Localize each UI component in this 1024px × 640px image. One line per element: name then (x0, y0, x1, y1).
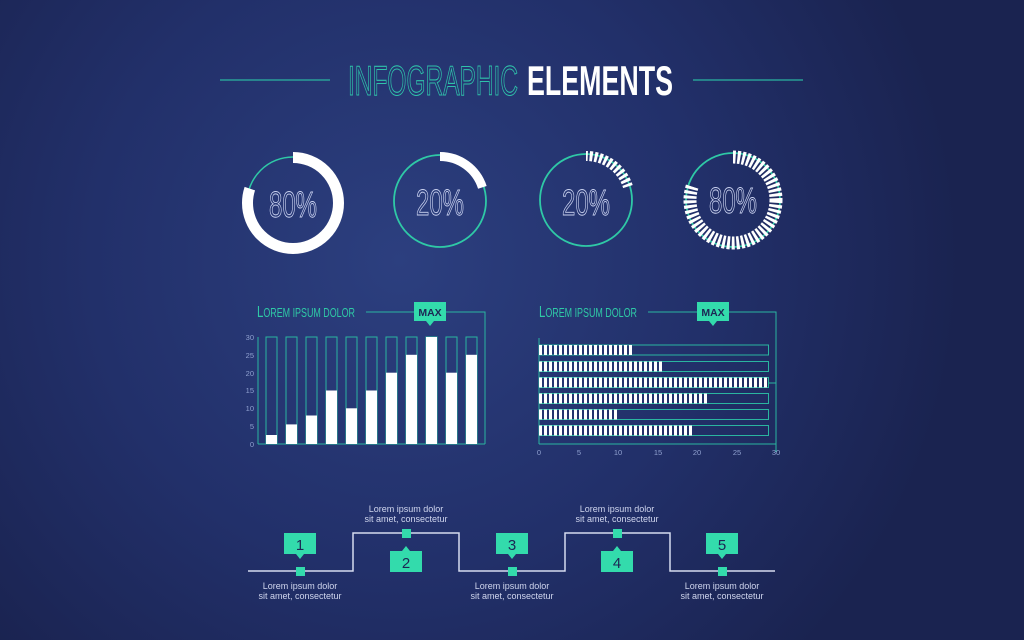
bar chart: 15 (246, 386, 254, 395)
timeline: Lorem ipsum dolor (263, 581, 337, 591)
bar chart (246, 302, 485, 449)
donut: 20% dashed: 20% (562, 182, 610, 223)
bar chart: 10 (246, 404, 254, 413)
horizontal bar chart: 20 (693, 448, 701, 457)
horizontal bar chart (537, 302, 780, 457)
horizontal bar chart: 0 (537, 448, 541, 457)
bar chart: LOREM IPSUM DOLOR (257, 304, 355, 321)
max tag: MAX (701, 307, 725, 319)
step 4 (601, 546, 633, 572)
timeline: sit amet, consectetur (364, 514, 448, 524)
timeline: sit amet, consectetur (680, 591, 764, 601)
max tag (414, 302, 446, 326)
step 1: 1 (296, 537, 304, 554)
bar chart: 5 (250, 422, 254, 431)
horizontal bar chart: 15 (654, 448, 662, 457)
timeline (248, 504, 775, 601)
timeline: sit amet, consectetur (258, 591, 342, 601)
bar chart: 0 (250, 440, 254, 449)
timeline: Lorem ipsum dolor (475, 581, 549, 591)
timeline: Lorem ipsum dolor (685, 581, 759, 591)
donut: 80% dashed (686, 153, 780, 247)
title (220, 57, 803, 104)
donut: 80% solid (247, 157, 339, 249)
timeline: sit amet, consectetur (470, 591, 554, 601)
timeline: Lorem ipsum dolor (369, 504, 443, 514)
title: ELEMENTS (527, 57, 673, 104)
donut: 80% solid: 80% (269, 184, 317, 225)
step 2 (390, 546, 422, 572)
step 5 (706, 533, 738, 559)
donut: 20% dashed (540, 154, 632, 246)
horizontal bar chart: LOREM IPSUM DOLOR (539, 304, 637, 321)
step 1 (284, 533, 316, 559)
max tag (697, 302, 729, 326)
max tag: MAX (418, 307, 442, 319)
horizontal bar chart: 25 (733, 448, 741, 457)
horizontal bar chart: 30 (772, 448, 780, 457)
bar chart: 30 (246, 333, 254, 342)
donut: 20% solid: 20% (416, 182, 464, 223)
bar chart: 20 (246, 369, 254, 378)
timeline: Lorem ipsum dolor (580, 504, 654, 514)
horizontal bar chart: 10 (614, 448, 622, 457)
donut: 20% solid (394, 155, 486, 247)
timeline: sit amet, consectetur (575, 514, 659, 524)
horizontal bar chart: 5 (577, 448, 581, 457)
donut: 80% dashed: 80% (709, 180, 757, 221)
title: INFOGRAPHIC (348, 57, 518, 104)
step 3: 3 (508, 537, 516, 554)
step 5: 5 (718, 537, 726, 554)
step 2: 2 (402, 555, 410, 572)
step 3 (496, 533, 528, 559)
bar chart: 25 (246, 351, 254, 360)
step 4: 4 (613, 555, 621, 572)
